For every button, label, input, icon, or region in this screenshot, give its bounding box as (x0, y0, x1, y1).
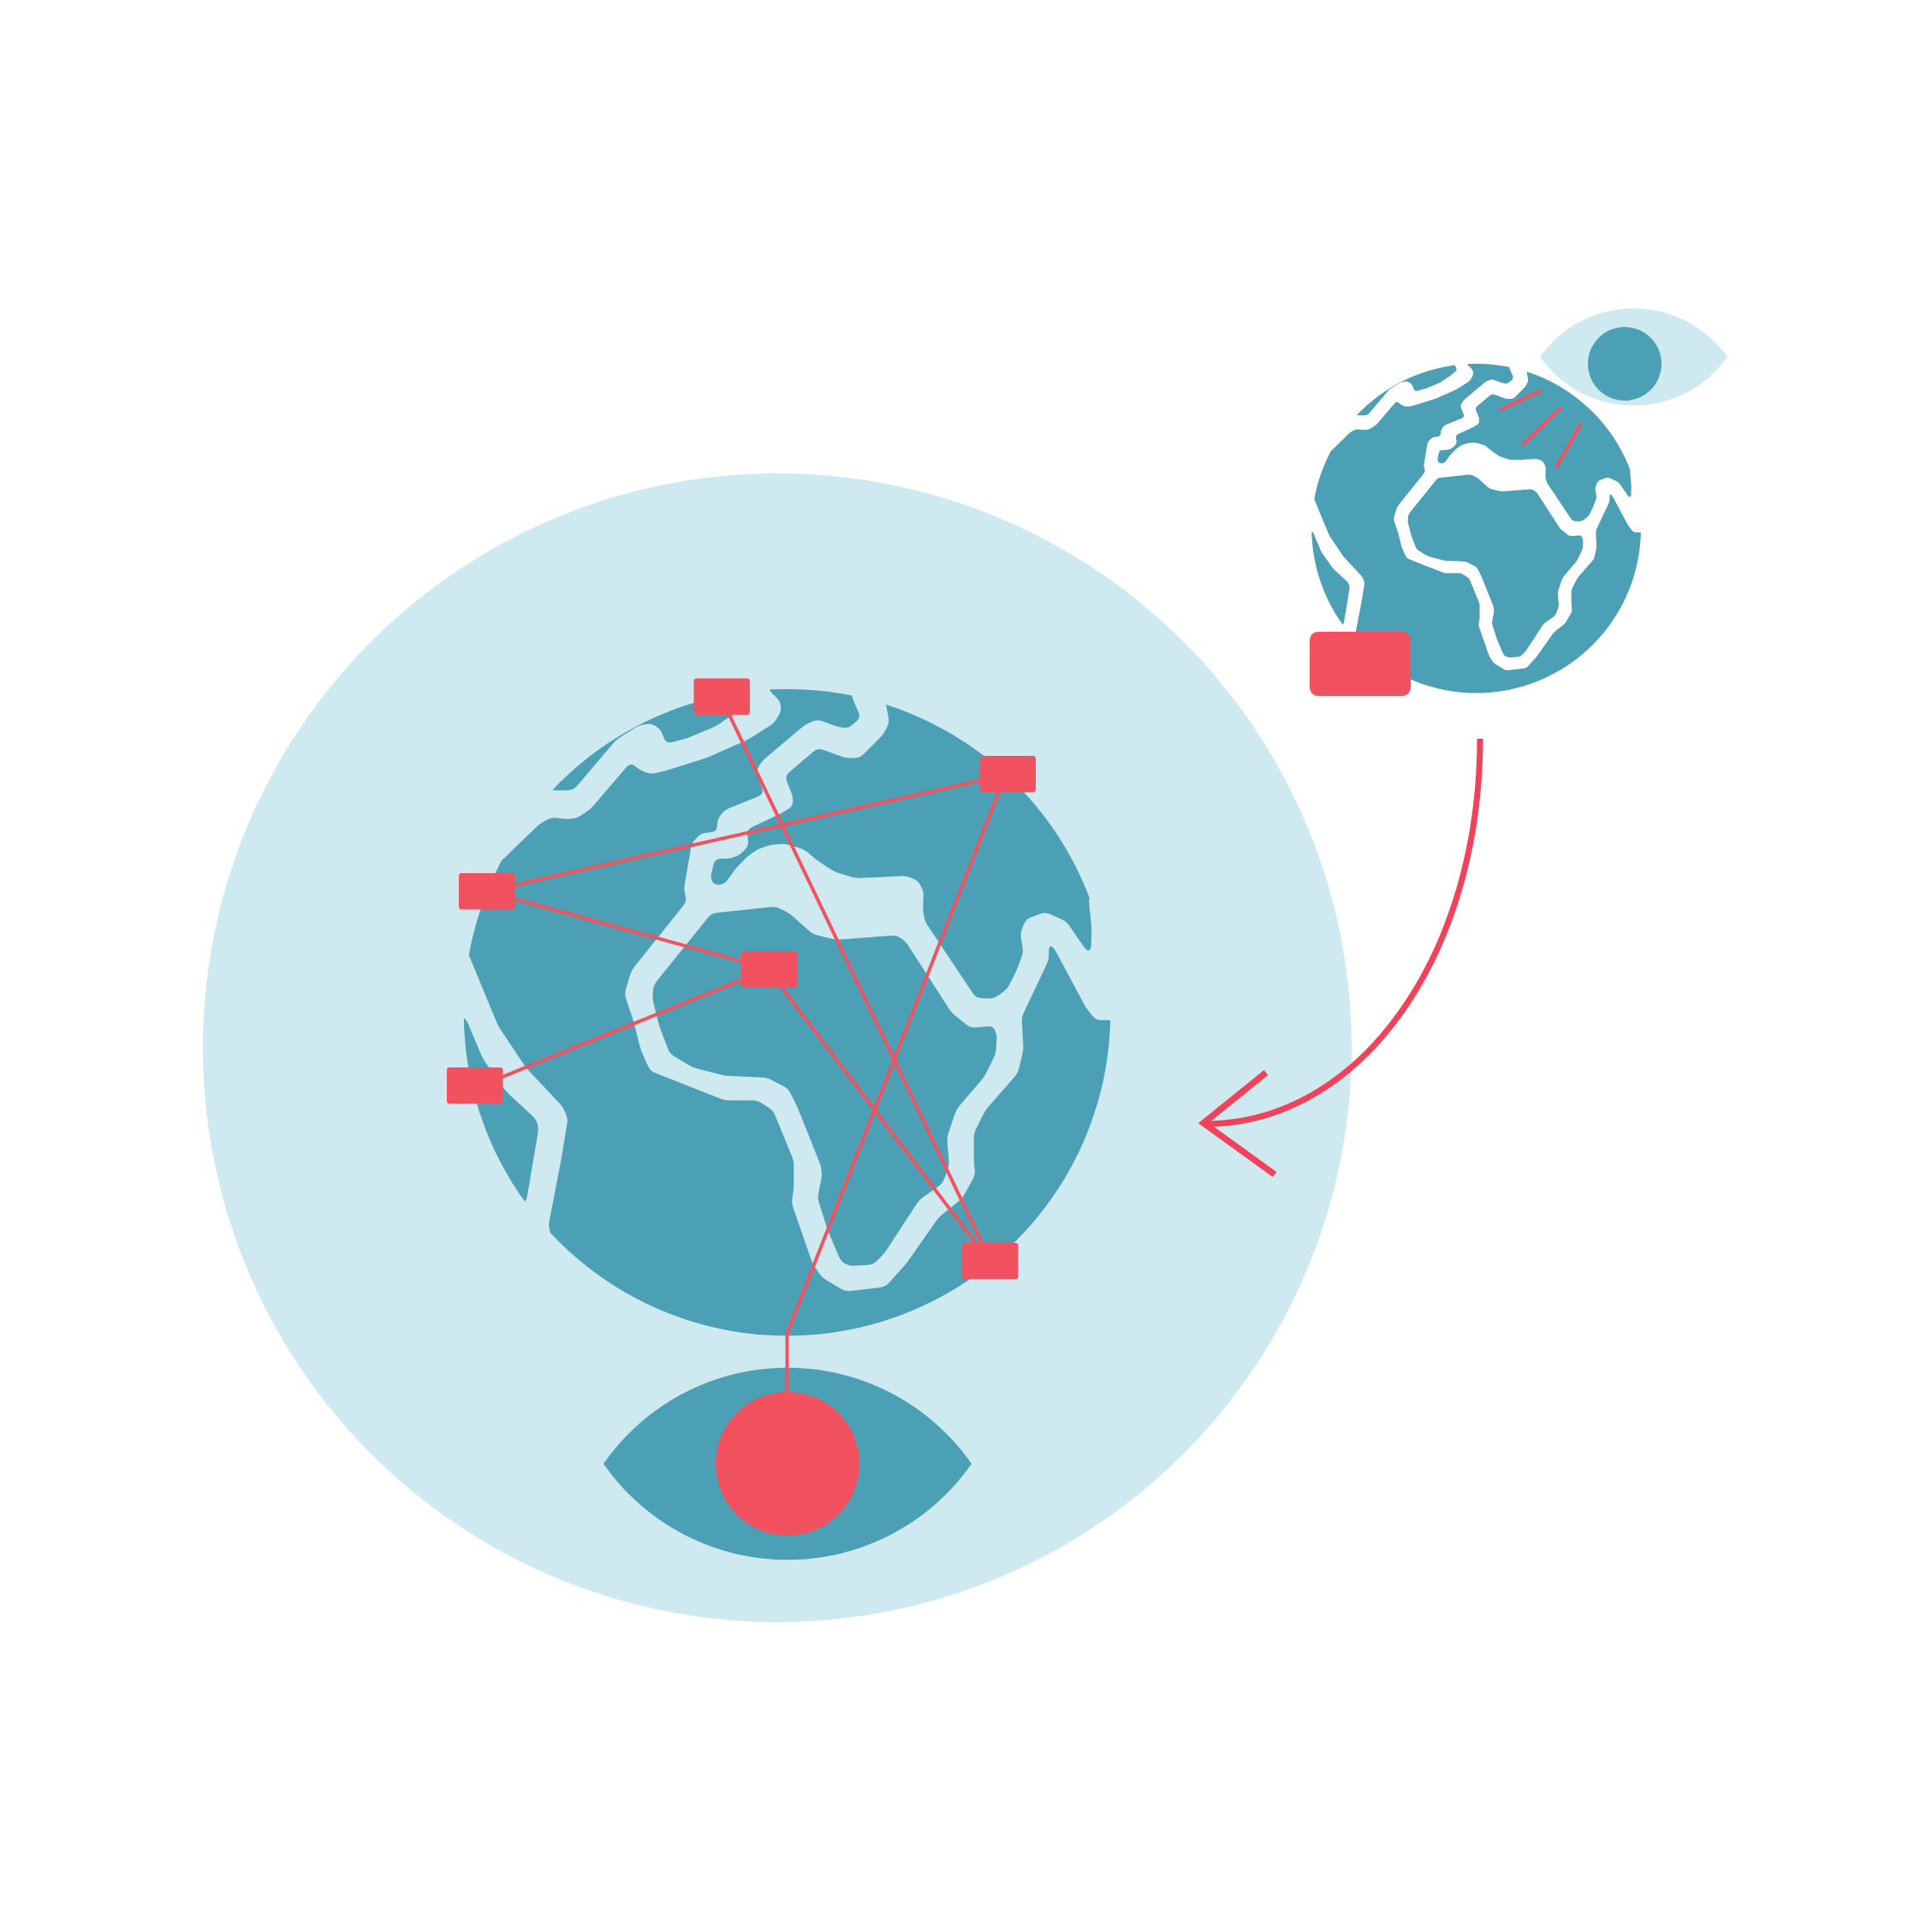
small globe body (1311, 364, 1641, 693)
arrow head (1204, 1073, 1275, 1174)
continent outlines (447, 676, 1133, 1291)
eye shape (603, 1368, 972, 1560)
small globe sight lines (1500, 390, 1581, 467)
small pupil (1588, 327, 1662, 401)
small red label block (1310, 632, 1411, 696)
large eye (603, 1368, 972, 1560)
network nodes (447, 678, 1036, 1279)
arrow shaft (1205, 739, 1480, 1124)
small globe (1303, 357, 1653, 693)
large globe (447, 676, 1133, 1336)
red pupil (716, 1392, 859, 1536)
small globe continent outlines (1303, 357, 1653, 670)
background circle (203, 473, 1352, 1622)
small eye (1540, 308, 1727, 406)
curved arrow (1204, 739, 1480, 1174)
globe body (464, 689, 1110, 1336)
small eye shape (1540, 308, 1727, 406)
connection lines (502, 715, 999, 1395)
